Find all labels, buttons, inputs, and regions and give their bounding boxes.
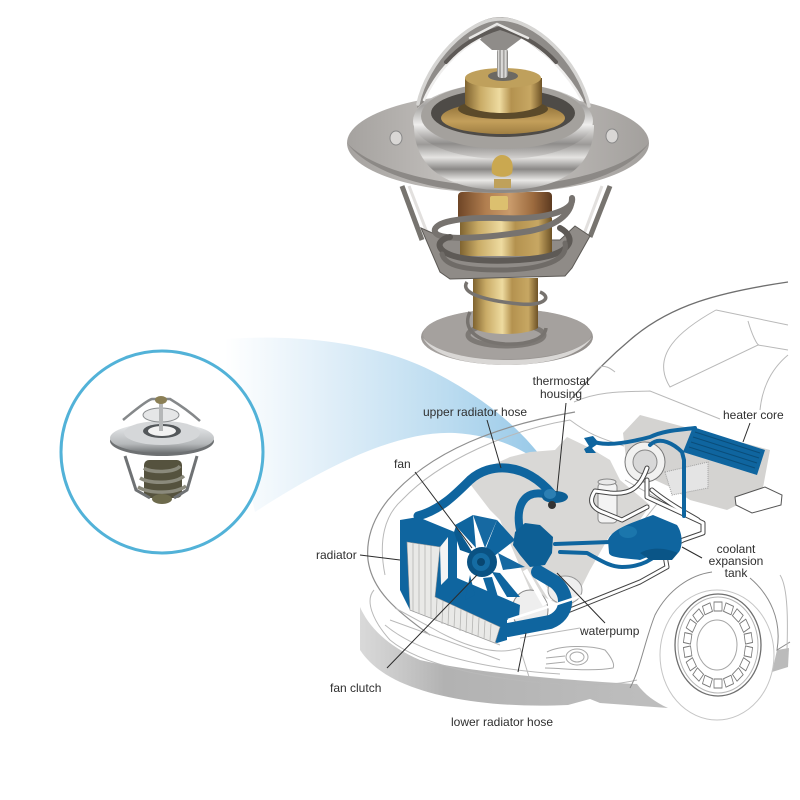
fan xyxy=(454,515,525,600)
small thermostat illustration xyxy=(110,396,214,504)
thermostat housing xyxy=(542,489,568,509)
label: thermostat housing: thermostat xyxy=(533,374,589,388)
heater hoses xyxy=(590,428,695,516)
water pump body xyxy=(513,523,553,567)
wheel xyxy=(660,590,774,720)
heater matrix box xyxy=(665,462,708,495)
label: radiator: radiator xyxy=(316,548,357,562)
label: coolant expansion tank: tank xyxy=(725,566,748,580)
right shadow xyxy=(772,648,789,672)
leader lines xyxy=(360,403,750,672)
heater outlet connector xyxy=(584,436,599,453)
white gap behind frame xyxy=(440,537,448,585)
brass top cylinder xyxy=(465,68,542,113)
car illustration xyxy=(360,282,790,720)
main spring coils xyxy=(435,198,572,270)
upper radiator hose xyxy=(418,468,552,516)
heater housing xyxy=(623,415,770,510)
lower radiator hose xyxy=(508,572,565,630)
heater core xyxy=(683,427,765,475)
lower spring back ring xyxy=(468,324,544,346)
small dome xyxy=(123,396,200,431)
control box xyxy=(735,487,782,513)
front brass pin xyxy=(492,155,513,188)
radiator fins xyxy=(407,542,500,643)
ground shadow xyxy=(360,607,668,708)
fan hub xyxy=(467,547,497,577)
spring bracket plate xyxy=(421,226,590,279)
chrome bowl xyxy=(413,83,594,190)
small legs xyxy=(125,456,197,498)
engine block xyxy=(467,437,650,610)
brass ring xyxy=(441,99,565,134)
flange xyxy=(347,93,649,193)
coolant expansion tank xyxy=(608,515,682,560)
bottom disc xyxy=(421,309,593,365)
lower spring xyxy=(466,282,546,344)
wheel slots xyxy=(683,602,753,688)
lower brass cylinder xyxy=(473,278,538,334)
stem xyxy=(497,48,508,78)
blue hoses xyxy=(418,428,695,630)
water pump pulley detail xyxy=(512,570,582,630)
label: fan clutch: fan clutch xyxy=(330,681,381,695)
label: fan: fan xyxy=(394,457,411,471)
radiator xyxy=(400,517,520,643)
label: upper radiator hose: upper radiator hose xyxy=(423,405,527,419)
thermostat to pump hose xyxy=(519,493,544,530)
silver tube xyxy=(508,590,600,620)
radiator blue frame xyxy=(400,517,520,643)
label: thermostat housing: housing xyxy=(540,387,582,401)
small flange xyxy=(110,421,214,456)
fan blades xyxy=(454,515,525,600)
white hoses xyxy=(520,468,703,630)
blue highlight beam xyxy=(215,338,556,512)
chrome cage arch xyxy=(417,17,590,108)
pipes to tank xyxy=(555,542,663,567)
label: coolant expansion tank: coolant xyxy=(717,542,755,556)
small spring and bulb xyxy=(138,460,186,504)
car body outlines xyxy=(368,282,790,688)
middle brass body xyxy=(458,192,552,256)
circle outline xyxy=(61,351,263,553)
fog lamp xyxy=(545,646,614,670)
label: waterpump: waterpump xyxy=(579,624,640,638)
large thermostat photo xyxy=(347,17,649,365)
side legs xyxy=(402,186,610,240)
blower unit xyxy=(625,442,665,482)
bottle xyxy=(598,479,617,523)
label: lower radiator hose: lower radiator hose xyxy=(451,715,553,729)
detail circle xyxy=(61,351,263,553)
label: heater core: heater core xyxy=(723,408,784,422)
label: coolant expansion tank: expansion xyxy=(709,554,763,568)
